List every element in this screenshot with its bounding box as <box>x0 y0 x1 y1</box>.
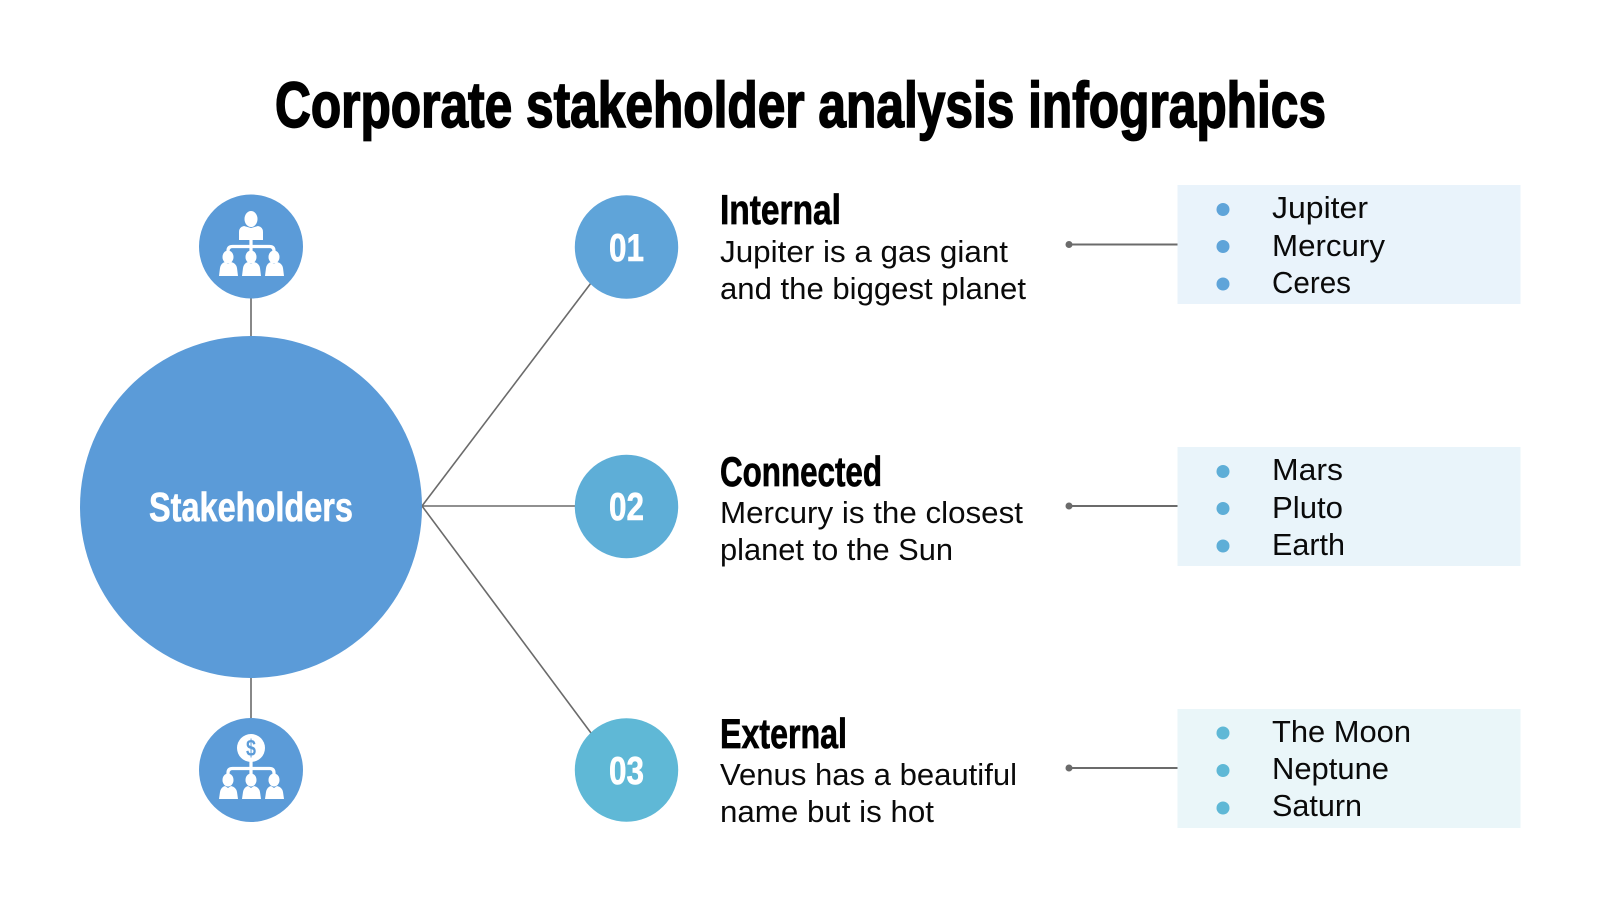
row 02 text: connected: planet to the Sun <box>720 532 953 567</box>
row 03 text: external: External <box>720 710 847 757</box>
row 02 text: connected <box>720 448 1023 567</box>
list panel: connected: Pluto <box>1272 490 1343 525</box>
list panel: internal: Ceres <box>1272 265 1351 300</box>
list panel: external <box>1178 709 1520 828</box>
row 03 leader line <box>1066 764 1178 772</box>
row 01 text: internal: Internal <box>720 186 841 233</box>
list panel: internal: Mercury <box>1272 228 1386 263</box>
row 01 text: internal: Jupiter is a gas giant <box>720 234 1008 269</box>
row 01 number badge <box>575 195 678 299</box>
list panel: connected: Mars <box>1272 452 1343 487</box>
row 02 number badge: 02 <box>609 486 644 529</box>
list panel: external: The Moon <box>1272 714 1411 749</box>
icon: organisation chart <box>199 194 303 298</box>
list panel: internal: Jupiter <box>1272 190 1368 225</box>
icon: finance organisation chart <box>199 718 303 822</box>
title: Corporate stakeholder analysis infographics <box>275 69 1326 141</box>
row 03 text: external <box>720 710 1017 829</box>
row 03 number badge <box>575 718 678 822</box>
row 02 text: connected: Mercury is the closest <box>720 495 1023 530</box>
row 01 text: internal <box>720 186 1026 306</box>
row 03 text: external: name but is hot <box>720 794 934 829</box>
row 02 text: connected: Connected <box>720 448 882 495</box>
icon: finance organisation chart: $ <box>246 735 256 761</box>
row 03 number badge: 03 <box>609 750 644 793</box>
row 01 leader line <box>1066 241 1178 248</box>
row 03 text: external: Venus has a beautiful <box>720 757 1017 792</box>
row 02 number badge <box>575 455 678 558</box>
row 01 text: internal: and the biggest planet <box>720 271 1026 306</box>
list panel: external: Saturn <box>1272 788 1362 823</box>
row 02 leader line <box>1066 502 1178 510</box>
connector lines from hub <box>251 283 591 733</box>
list panel: connected: Earth <box>1272 527 1345 562</box>
list panel: external: Neptune <box>1272 751 1389 786</box>
hub circle: stakeholders <box>80 336 422 678</box>
list panel: internal <box>1178 185 1520 304</box>
list panel: connected <box>1178 447 1520 566</box>
row 01 number badge: 01 <box>609 227 644 270</box>
hub circle: stakeholders: Stakeholders <box>149 484 353 530</box>
